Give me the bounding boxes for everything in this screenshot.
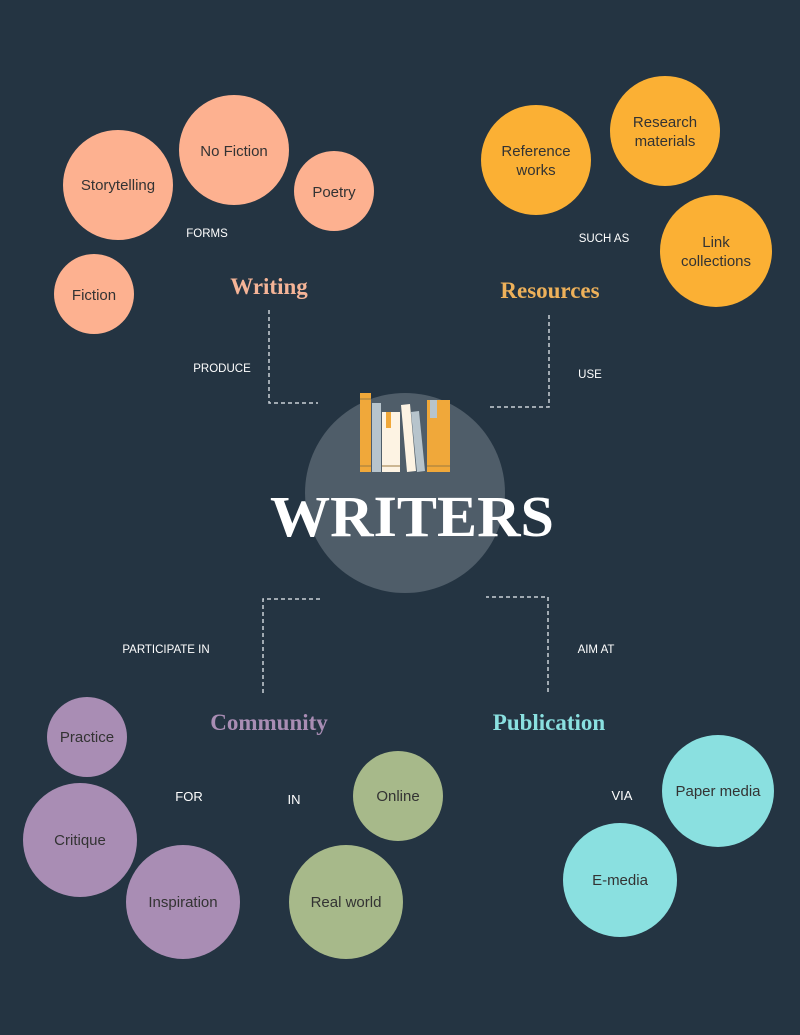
bubbles: community: Critique (54, 832, 106, 849)
title: WRITERS (270, 484, 554, 549)
bubbles: resources: Link (702, 234, 730, 251)
bubbles: resources (481, 76, 772, 307)
connector labels: FOR (175, 789, 203, 804)
connector labels: IN (288, 792, 300, 807)
heading: Writing: Writing (230, 274, 308, 299)
heading: Publication: Publication (493, 710, 605, 735)
connector labels (122, 228, 633, 807)
bubbles: publication: Paper media (675, 783, 761, 800)
bubbles: writing: No Fiction (200, 143, 268, 160)
bubbles: community: Inspiration (148, 894, 218, 911)
bubbles: publication (563, 735, 774, 937)
bubbles: resources: Research (633, 114, 697, 131)
bubbles: writing: Fiction (72, 287, 116, 304)
icon: books (360, 393, 450, 472)
connector labels: VIA (612, 788, 633, 803)
heading: Community: Community (210, 710, 328, 735)
bubbles: resources: materials (635, 133, 695, 150)
bubbles: resources: collections (681, 253, 751, 270)
connector labels: PARTICIPATE IN (122, 644, 210, 656)
bubbles: resources: Reference (501, 143, 571, 160)
connector labels: FORMS (186, 228, 228, 240)
connector labels: USE (578, 369, 602, 381)
bubbles: writing (54, 95, 374, 334)
bubbles: community: Practice (60, 729, 114, 746)
connector labels: PRODUCE (193, 363, 251, 375)
bubbles: writing: Storytelling (81, 177, 155, 194)
bubbles: community (23, 697, 443, 959)
center circle (305, 393, 505, 593)
bubbles: writing: Poetry (312, 184, 356, 201)
bubbles: resources: works (515, 162, 556, 179)
bubbles: publication: E-media (592, 872, 649, 889)
heading: Resources: Resources (500, 278, 600, 303)
connector labels: AIM AT (578, 644, 614, 656)
bubbles: community: Real world (311, 894, 381, 911)
bubbles: community: Online (376, 788, 420, 805)
connector labels: SUCH AS (579, 233, 630, 245)
